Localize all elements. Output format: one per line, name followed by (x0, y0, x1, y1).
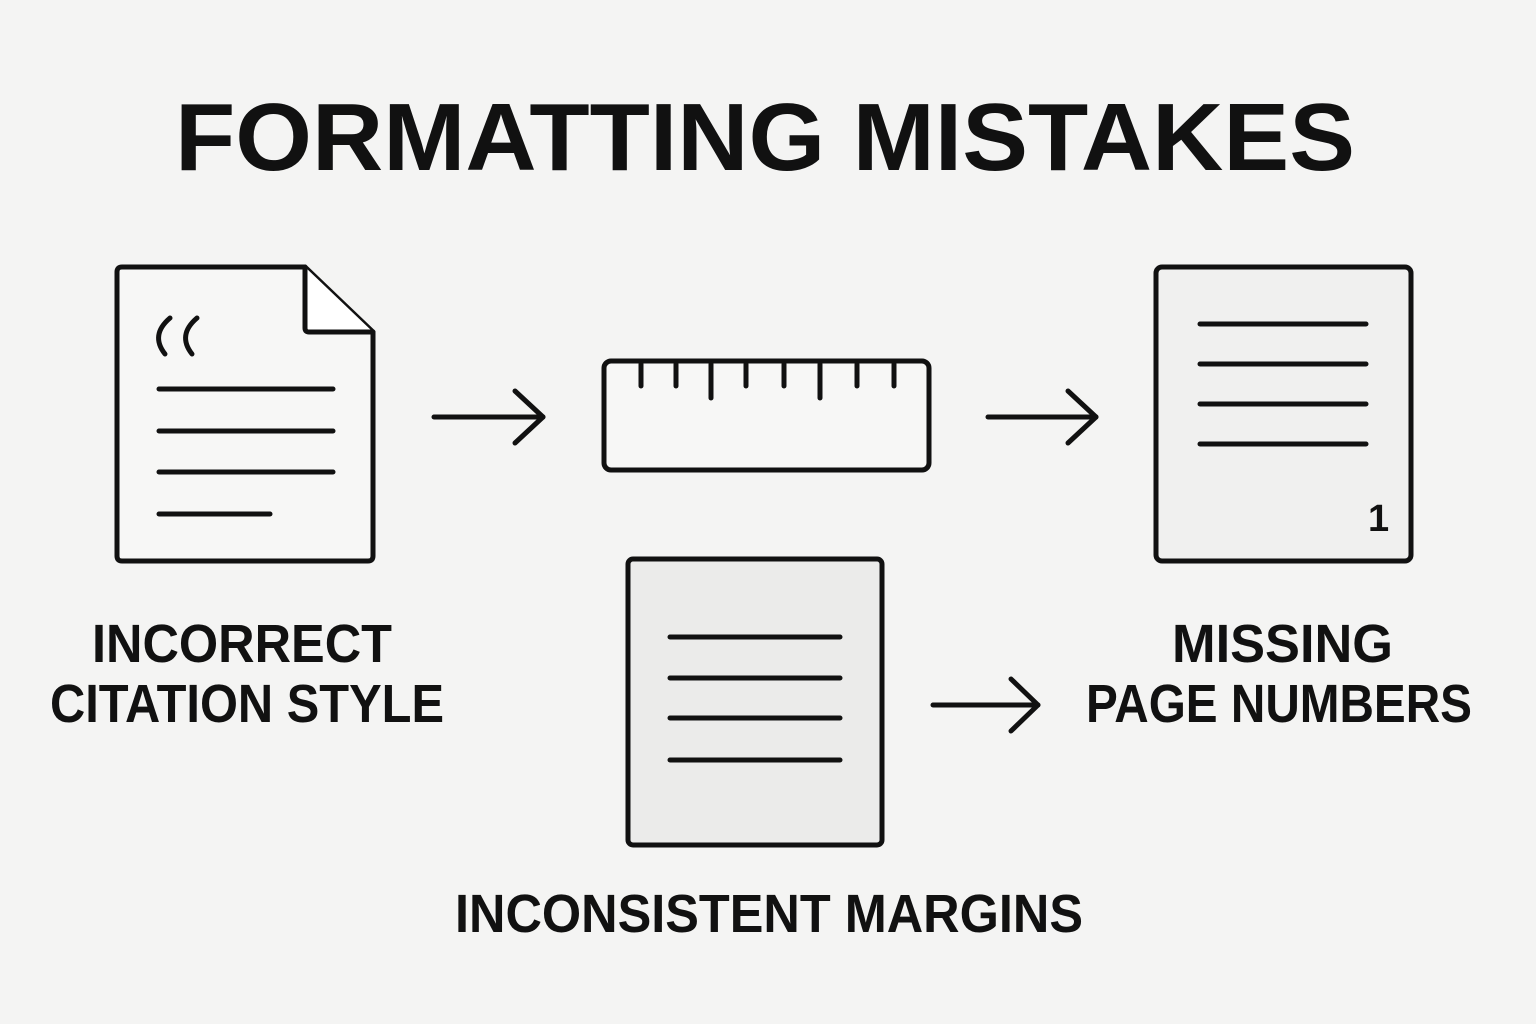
icon: citation document (117, 267, 373, 561)
arrow: margins to missing page numbers (933, 679, 1038, 731)
icon: ruler (604, 361, 929, 470)
label: incorrect citation style (50, 614, 444, 734)
label: missing page numbers: MISSING (1172, 614, 1393, 674)
arrow: ruler to page numbers (988, 391, 1096, 443)
label: missing page numbers: PAGE NUMBERS (1086, 674, 1472, 734)
label: incorrect citation style: INCORRECT (92, 614, 392, 674)
title: FORMATTING MISTAKES (175, 84, 1355, 191)
icon: quote marks (159, 318, 197, 354)
label: inconsistent margins: INCONSISTENT MARGINS (455, 884, 1083, 944)
arrow: citation to ruler (434, 391, 543, 443)
label: incorrect citation style: CITATION STYLE (50, 674, 444, 734)
label: missing page numbers (1086, 614, 1472, 734)
icon: page with number (1156, 267, 1411, 561)
icon: margins page (628, 559, 882, 845)
page number: 1 (1368, 498, 1389, 540)
